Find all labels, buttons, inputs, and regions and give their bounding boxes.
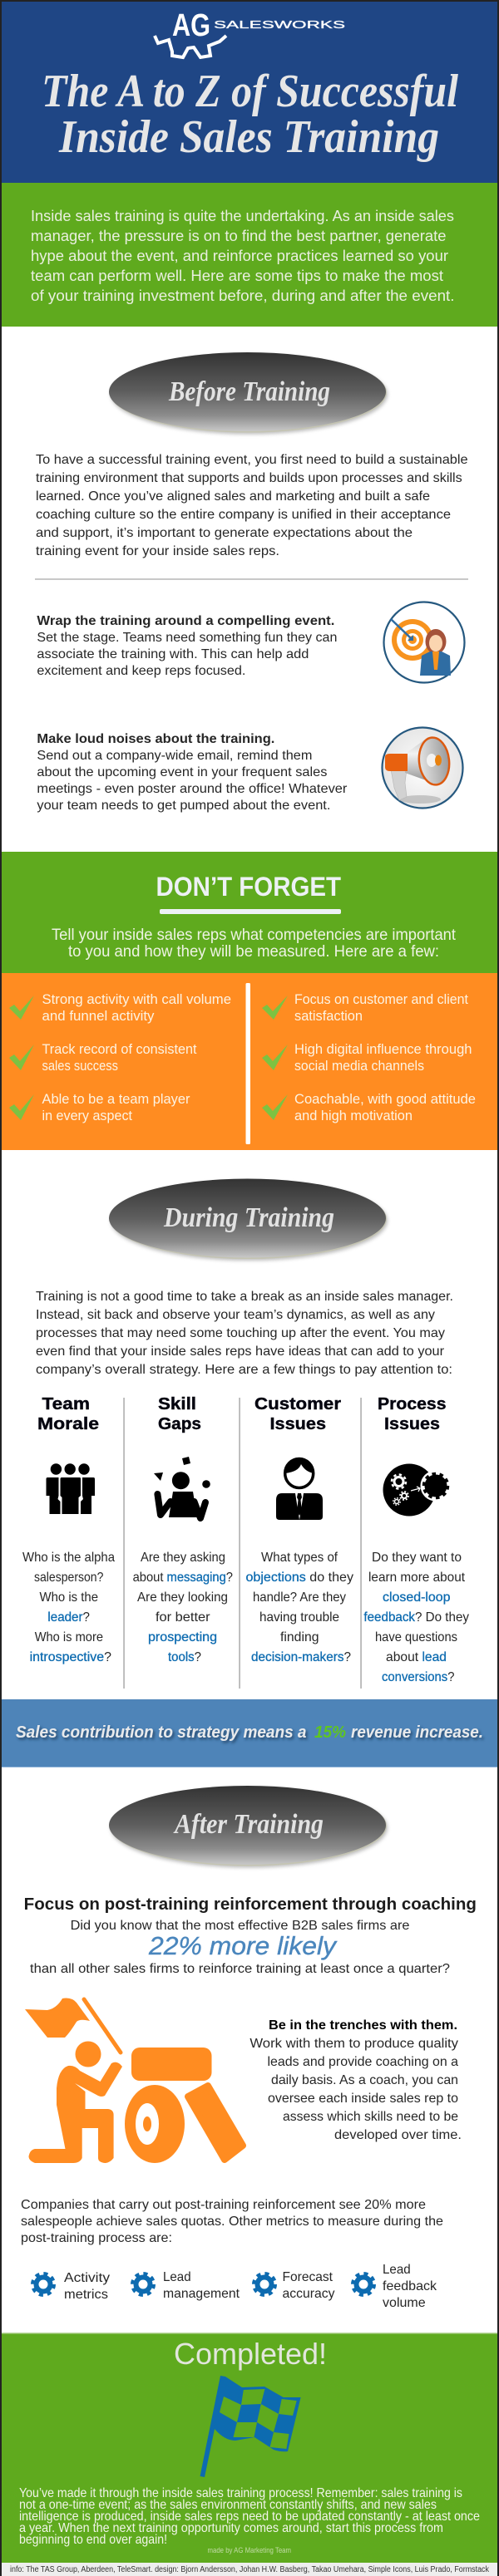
item: digital influence: High digital influence through bbox=[294, 1042, 472, 1057]
text: process issues questions: learn more about bbox=[368, 1571, 466, 1585]
item: track record: Track record of consistent bbox=[42, 1042, 197, 1057]
panel: before training bbox=[2, 327, 497, 852]
intro text: Inside sales training is quite the undertaking. As an inside sales bbox=[31, 208, 454, 224]
icon: team bbox=[47, 1463, 95, 1514]
text: reinforce once a quarter: than all other sales firms to reinforce training at least once a quarter? bbox=[30, 1962, 450, 1976]
intro text bbox=[31, 208, 454, 304]
text: team morale questions: salesperson? bbox=[34, 1571, 103, 1585]
text: team morale questions bbox=[22, 1551, 115, 1664]
icon: juggling person bbox=[154, 1457, 210, 1518]
text: skill gaps questions: about messaging? bbox=[133, 1571, 233, 1585]
heading: customer issues: Issues bbox=[269, 1415, 326, 1433]
text: closing paragraph: not a one-time event; as the sales environment constantly shifts, and new sales bbox=[19, 2498, 437, 2512]
text: before paragraph: learned. Once you’ve aligned sales and marketing and built a safe bbox=[36, 489, 430, 504]
text: customer issues questions: finding bbox=[280, 1630, 319, 1644]
item: team player: Able to be a team player bbox=[42, 1092, 190, 1107]
text: skill gaps questions: Are they looking bbox=[137, 1590, 228, 1605]
intro text: team can perform well. Here are some tips to make the most bbox=[31, 268, 443, 284]
text: wrap the training: associate the training with. This can help add bbox=[37, 647, 309, 661]
text: team morale questions: Who is the bbox=[40, 1590, 98, 1605]
text: make loud noises: about the upcoming event in your frequent sales bbox=[37, 765, 327, 779]
logo: AG Salesworks: AG bbox=[172, 8, 210, 43]
text: competencies: Tell your inside sales reps what competencies are important bbox=[52, 927, 457, 944]
text: process issues questions: feedback? Do they bbox=[363, 1610, 469, 1625]
text: process issues questions: have questions bbox=[375, 1630, 457, 1644]
panel: introduction bbox=[2, 183, 497, 327]
metric: activity metrics: metrics bbox=[64, 2288, 108, 2302]
panel: during training bbox=[2, 1150, 497, 1699]
text: team morale questions: leader? bbox=[47, 1610, 90, 1625]
text: process issues questions: Do they want to bbox=[372, 1551, 462, 1565]
text: process issues questions: conversions? bbox=[382, 1670, 455, 1684]
item: customer focus bbox=[262, 992, 468, 1024]
text: wrap the training bbox=[37, 614, 337, 678]
callout text: 15% bbox=[314, 1723, 346, 1742]
text: before paragraph: training event for your inside sales reps. bbox=[36, 544, 279, 558]
metric: forecast accuracy bbox=[254, 2270, 334, 2301]
item: coachable: and high motivation bbox=[294, 1109, 413, 1123]
heading: post-training reinforcement: Focus on post-training reinforcement through coaching bbox=[24, 1895, 477, 1914]
text: customer issues questions: having trouble bbox=[259, 1610, 339, 1625]
callout text bbox=[16, 1723, 483, 1742]
text: make loud noises: meetings - even poster around the office! Whatever bbox=[37, 782, 348, 796]
text: be in the trenches: oversee each inside sales rep to bbox=[268, 2092, 458, 2106]
text: before paragraph bbox=[36, 453, 468, 558]
text: before paragraph: coaching culture so the entire company is unified in their acceptance bbox=[36, 508, 451, 522]
heading: process issues: Issues bbox=[384, 1415, 440, 1433]
item: strong activity: Strong activity with call volume bbox=[42, 992, 231, 1007]
text: during paragraph: even find that your inside sales reps have ideas that can add to your bbox=[36, 1345, 445, 1359]
text: team morale questions: Who is more bbox=[35, 1630, 103, 1644]
title bbox=[42, 66, 458, 163]
column: customer issues bbox=[246, 1395, 353, 1664]
panel: header bbox=[2, 2, 497, 183]
text: process issues questions bbox=[363, 1551, 469, 1684]
text: competencies bbox=[52, 927, 457, 961]
heading: before training bbox=[109, 352, 388, 434]
text: post-training metrics intro: post-training process are: bbox=[21, 2231, 172, 2245]
metric: lead feedback volume: Lead bbox=[383, 2263, 411, 2277]
text: be in the trenches: leads and provide coaching on a bbox=[268, 2055, 458, 2069]
heading: team morale bbox=[37, 1395, 99, 1433]
text: closing paragraph: a year. When the next training opportunity comes around, start this process from bbox=[19, 2521, 443, 2535]
column: process issues bbox=[363, 1395, 469, 1684]
icon: target and businesswoman bbox=[384, 602, 464, 683]
metric: lead management: Lead bbox=[163, 2270, 191, 2284]
text: competencies: to you and how they will be measured. Here are a few: bbox=[68, 943, 439, 961]
text: post-training metrics intro: Companies that carry out post-training reinforcement see 20% more bbox=[21, 2198, 426, 2212]
item: coachable: Coachable, with good attitude bbox=[294, 1092, 476, 1107]
metric: forecast accuracy: accuracy bbox=[283, 2287, 334, 2301]
panel: don't forget bbox=[2, 852, 497, 973]
text: skill gaps questions: tools? bbox=[168, 1650, 201, 1664]
column: team morale bbox=[22, 1395, 115, 1664]
column: skill gaps bbox=[133, 1395, 233, 1664]
heading: during training bbox=[109, 1178, 388, 1261]
text: during paragraph: Training is not a good time to take a break as an inside sales manager. bbox=[36, 1290, 453, 1304]
heading: team morale: Morale bbox=[37, 1415, 99, 1433]
panel: completed bbox=[2, 2333, 497, 2563]
text: during paragraph: company’s overall strategy. Here are a few things to pay attention to: bbox=[36, 1363, 452, 1377]
text: process issues questions: about lead bbox=[386, 1650, 447, 1664]
text: before paragraph: and support, it’s important to generate expectations about the bbox=[36, 526, 413, 540]
text: be in the trenches bbox=[250, 2018, 462, 2142]
text: skill gaps questions bbox=[133, 1551, 233, 1664]
text: post-training metrics intro: salespeople achieve sales quotas. Other metrics to measure during the bbox=[21, 2215, 443, 2229]
item: digital influence: social media channels bbox=[294, 1059, 424, 1074]
icon: businessman bbox=[276, 1459, 323, 1520]
heading: skill gaps bbox=[158, 1395, 201, 1433]
item: coachable bbox=[262, 1092, 476, 1123]
text: customer issues questions: handle? Are they bbox=[253, 1590, 346, 1605]
credit: made by: made by AG Marketing Team bbox=[208, 2546, 291, 2554]
text: did you know: Did you know that the most effective B2B sales firms are bbox=[71, 1919, 410, 1933]
item: digital influence bbox=[262, 1042, 472, 1074]
metric: forecast accuracy: Forecast bbox=[283, 2270, 333, 2284]
icon: checkered flag bbox=[200, 2376, 301, 2477]
heading: skill gaps: Skill bbox=[158, 1395, 196, 1413]
heading: team morale: Team bbox=[42, 1395, 90, 1413]
text: wrap the training: excitement and keep reps focused. bbox=[37, 664, 245, 678]
text: team morale questions: introspective? bbox=[30, 1650, 111, 1664]
text: wrap the training: Wrap the training around a compelling event. bbox=[37, 614, 334, 628]
intro text: manager, the pressure is on to find the best partner, generate bbox=[31, 228, 446, 244]
footer: sources bbox=[2, 2563, 497, 2576]
text: during paragraph: processes that may need some touching up after the event. You may bbox=[36, 1326, 445, 1340]
item: strong activity: and funnel activity bbox=[42, 1009, 155, 1024]
text: make loud noises: Make loud noises about the training. bbox=[37, 732, 274, 746]
logo: AG Salesworks bbox=[155, 8, 345, 57]
heading: customer issues bbox=[254, 1395, 341, 1433]
heading: process issues: Process bbox=[378, 1395, 446, 1413]
stat: 22% more likely: 22% more likely bbox=[148, 1931, 338, 1960]
text: make loud noises: Send out a company-wide email, remind them bbox=[37, 749, 312, 763]
text: closing paragraph bbox=[19, 2486, 480, 2547]
metric: lead feedback volume: volume bbox=[383, 2296, 426, 2310]
item: customer focus: Focus on customer and client bbox=[294, 992, 468, 1007]
text: make loud noises bbox=[37, 732, 348, 813]
text: during paragraph bbox=[36, 1290, 453, 1377]
text: be in the trenches: Be in the trenches with them. bbox=[269, 2018, 457, 2033]
title: The A to Z of Successful bbox=[42, 66, 458, 117]
callout text: Sales contribution to strategy means a bbox=[16, 1723, 306, 1742]
intro text: hype about the event, and reinforce practices learned so your bbox=[31, 248, 448, 264]
text: before paragraph: To have a successful training event, you first need to build a sustainable bbox=[36, 453, 468, 467]
text: process issues questions: closed-loop bbox=[383, 1590, 451, 1605]
text: post-training metrics intro bbox=[21, 2198, 443, 2245]
intro text: of your training investment before, during and after the event. bbox=[31, 288, 454, 304]
text: be in the trenches: daily basis. As a coach, you can bbox=[271, 2073, 458, 2087]
callout text: revenue increase. bbox=[351, 1723, 483, 1742]
text: skill gaps questions: for better bbox=[156, 1610, 210, 1625]
text: closing paragraph: beginning to end over again! bbox=[19, 2533, 167, 2547]
item: team player bbox=[9, 1092, 190, 1123]
text: wrap the training: Set the stage. Teams need something fun they can bbox=[37, 631, 337, 645]
text: make loud noises: your team needs to get pumped about the event. bbox=[37, 799, 330, 813]
heading: customer issues: Customer bbox=[254, 1395, 341, 1413]
logo: AG Salesworks: SALESWORKS bbox=[214, 19, 345, 31]
heading: process issues bbox=[378, 1395, 446, 1433]
text: be in the trenches: assess which skills need to be bbox=[283, 2110, 458, 2124]
heading: don't forget: DON’T FORGET bbox=[156, 872, 341, 902]
item: track record bbox=[9, 1042, 197, 1074]
heading: during training: During Training bbox=[163, 1202, 334, 1233]
text: customer issues questions: decision-makers? bbox=[251, 1650, 351, 1664]
metric: activity metrics bbox=[32, 2271, 110, 2302]
icon: head with gears bbox=[383, 1464, 451, 1516]
text: be in the trenches: Work with them to produce quality bbox=[250, 2037, 458, 2051]
metric: activity metrics: Activity bbox=[64, 2271, 110, 2285]
title: Inside Sales Training bbox=[58, 111, 439, 163]
text: customer issues questions: objections do they bbox=[246, 1571, 353, 1585]
heading: after training bbox=[109, 1786, 388, 1868]
metric: lead feedback volume bbox=[353, 2263, 437, 2310]
text: skill gaps questions: Are they asking bbox=[141, 1551, 225, 1565]
panel: competencies checklist bbox=[2, 973, 497, 1150]
metric: lead management: management bbox=[163, 2287, 240, 2301]
text: before paragraph: training environment that supports and builds upon processes and skills bbox=[36, 471, 462, 485]
heading: after training: After Training bbox=[173, 1809, 324, 1840]
item: track record: sales success bbox=[42, 1059, 118, 1074]
heading: before training: Before Training bbox=[168, 376, 330, 407]
metric: lead management bbox=[132, 2270, 240, 2301]
text: during paragraph: Instead, sit back and observe your team’s dynamics, as well as any bbox=[36, 1308, 435, 1322]
item: strong activity bbox=[9, 992, 231, 1024]
panel: after training bbox=[2, 1767, 497, 2333]
icon: megaphone bbox=[383, 728, 462, 808]
text: customer issues questions: What types of bbox=[261, 1551, 338, 1565]
panel: revenue callout bbox=[2, 1699, 497, 1768]
icon: person with flag and tires bbox=[25, 1998, 243, 2163]
text: skill gaps questions: prospecting bbox=[148, 1630, 217, 1644]
text: customer issues questions bbox=[246, 1551, 353, 1664]
item: customer focus: satisfaction bbox=[294, 1009, 363, 1024]
heading: completed: Completed! bbox=[174, 2337, 327, 2371]
text: team morale questions: Who is the alpha bbox=[22, 1551, 115, 1565]
heading: skill gaps: Gaps bbox=[158, 1415, 201, 1433]
text: be in the trenches: developed over time. bbox=[334, 2128, 462, 2142]
item: team player: in every aspect bbox=[42, 1109, 132, 1123]
metric: lead feedback volume: feedback bbox=[383, 2279, 437, 2293]
